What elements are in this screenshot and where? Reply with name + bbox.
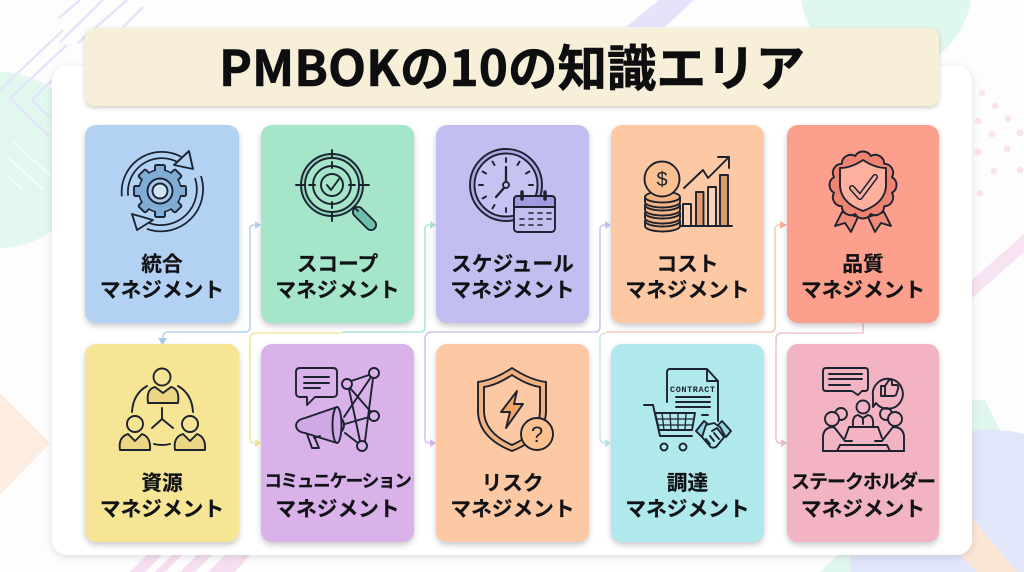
label: マネジメント [801,273,925,303]
label: マネジメント [625,492,750,522]
label: 品質 [842,247,884,277]
label: スコープ [297,247,378,277]
icon: speech bubble, megaphone and network [295,367,380,452]
label: リスク [481,466,544,496]
card: スケジュールマネジメント [436,125,589,323]
label [791,467,935,522]
label: スケジュール [451,247,574,277]
label: マネジメント [625,273,750,303]
label: コミュニケーション [264,468,411,493]
card: 資源マネジメント [85,344,239,542]
card: 統合マネジメント [85,125,239,323]
label [450,466,575,522]
label [801,247,925,303]
label: マネジメント [275,492,400,522]
icon: target magnifier [295,149,377,231]
icon: contract, cart and handshake [643,368,732,452]
card: リスクマネジメント [436,344,589,542]
connector arrows between cards [158,221,864,447]
icon: shield with lightning and question mark [477,367,554,452]
panel: main white board [52,66,972,555]
card: スコープマネジメント [261,125,414,323]
card: ステークホルダーマネジメント [787,344,939,542]
icon: contract, cart and handshake: CONTRACT [670,385,715,395]
icon: quality badge shield [828,150,898,233]
card: 品質マネジメント [787,125,939,323]
label: マネジメント [801,492,925,522]
icon: clock and calendar [469,148,556,233]
icon: coins and rising chart [644,156,733,232]
label: コスト [656,247,719,277]
card: 調達マネジメント [611,344,764,542]
title: PMBOKの10の知識エリア [219,30,805,101]
label: ステークホルダー [791,467,935,494]
title [85,28,939,106]
label: マネジメント [100,492,224,522]
label [625,466,750,522]
icon: team of three people [118,368,206,451]
label [100,466,224,522]
icon: stakeholders meeting with feedback [822,367,905,452]
label: マネジメント [275,273,400,303]
label [275,247,400,303]
label [100,247,224,303]
label: マネジメント [450,273,575,303]
icon: gear with cycle arrows [120,150,204,232]
label: 資源 [141,466,183,496]
label: マネジメント [100,273,224,303]
label: 調達 [667,466,708,496]
icon: shield with lightning and question mark: ? [531,422,543,447]
label: 統合 [141,247,183,277]
icon: coins and rising chart: $ [656,169,668,191]
card: コミュニケーションマネジメント [261,344,414,542]
label: マネジメント [450,492,575,522]
card: コストマネジメント [611,125,764,323]
label [264,468,411,522]
label [450,247,575,303]
label [625,247,750,303]
